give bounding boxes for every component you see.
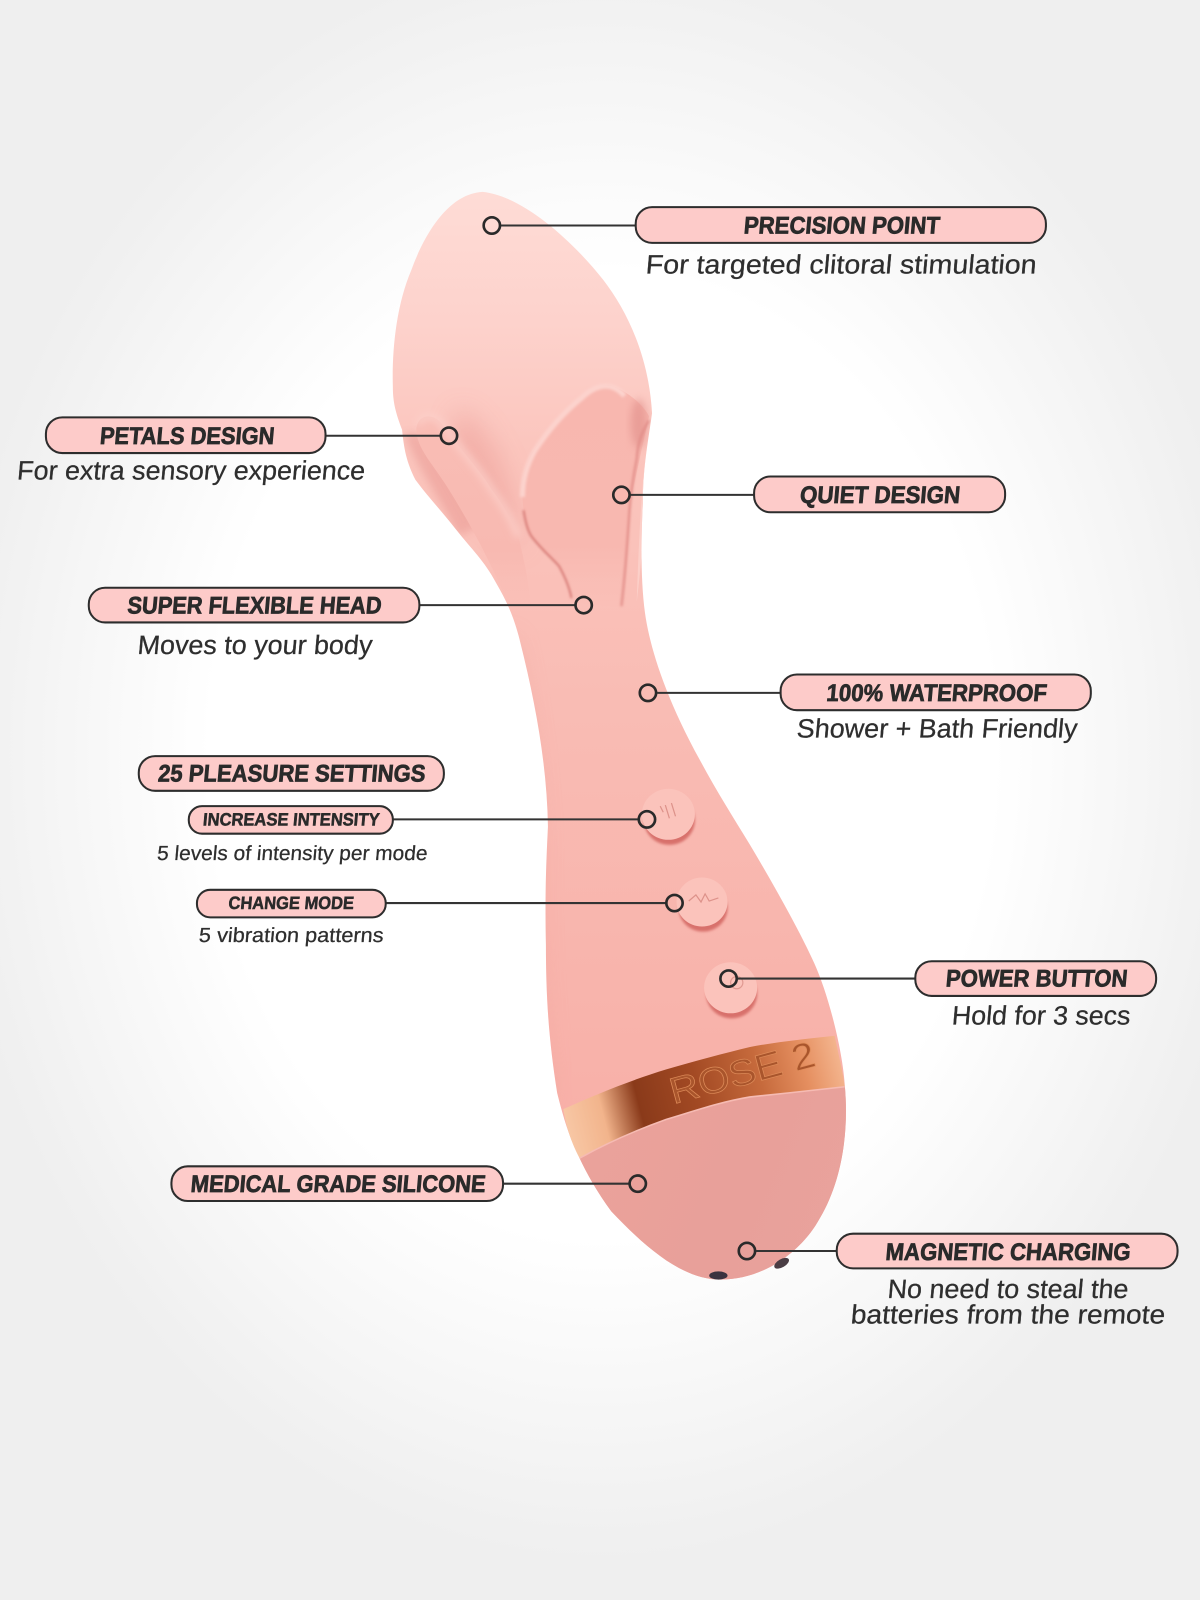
callout: increase intensity: INCREASE INTENSITY	[202, 810, 381, 830]
callout: increase intensity	[156, 806, 655, 865]
callout: change mode	[197, 890, 683, 947]
device body	[393, 192, 846, 1280]
callout: waterproof: 100% WATERPROOF	[825, 680, 1048, 707]
callout: super flexible head	[89, 588, 592, 660]
charging contacts	[709, 1256, 791, 1280]
button: change mode	[677, 878, 728, 932]
left petal shadow	[404, 434, 480, 536]
base cap	[580, 1087, 846, 1280]
callout: quiet design	[613, 477, 1005, 512]
callout: magnetic charging: No need to steal the	[886, 1274, 1130, 1304]
callout: magnetic charging: MAGNETIC CHARGING	[885, 1239, 1132, 1266]
callout: medical grade silicone: MEDICAL GRADE SILICONE	[190, 1171, 487, 1198]
callout: medical grade silicone	[171, 1166, 646, 1201]
button: power	[704, 962, 757, 1018]
callout: petals design	[16, 417, 457, 486]
callout: waterproof	[640, 674, 1091, 744]
right fold	[621, 420, 649, 606]
surface shading	[404, 386, 651, 607]
callout: magnetic charging	[739, 1234, 1178, 1329]
callout: quiet design: QUIET DESIGN	[799, 482, 961, 509]
callout: magnetic charging: batteries from the remote	[850, 1300, 1167, 1329]
callout: precision point	[484, 207, 1046, 279]
callout: petals design: PETALS DESIGN	[99, 423, 276, 450]
callout: waterproof: Shower + Bath Friendly	[796, 714, 1080, 744]
petal crease	[523, 510, 571, 598]
heading: 25 pleasure settings: 25 PLEASURE SETTINGS	[157, 761, 427, 788]
callout: power button	[720, 961, 1156, 1030]
right petal	[524, 388, 649, 552]
callout: increase intensity: 5 levels of intensity per mode	[156, 842, 429, 865]
callout: power button: Hold for 3 secs	[951, 1001, 1132, 1030]
product illustration	[393, 192, 846, 1280]
callout: petals design: For extra sensory experience	[16, 456, 367, 486]
rose gold band	[563, 1036, 845, 1158]
callout: change mode: CHANGE MODE	[228, 893, 355, 913]
band engraving: ROSE 2	[665, 1034, 819, 1112]
callout: change mode: 5 vibration patterns	[198, 924, 385, 947]
callout: super flexible head: Moves to your body	[136, 630, 374, 660]
button: increase intensity	[642, 789, 695, 845]
callout: power button: POWER BUTTON	[945, 966, 1129, 993]
left petal	[416, 422, 496, 552]
callout: precision point: PRECISION POINT	[743, 213, 941, 240]
callout: precision point: For targeted clitoral stimulation	[645, 250, 1038, 279]
callout: super flexible head: SUPER FLEXIBLE HEAD	[126, 592, 383, 619]
